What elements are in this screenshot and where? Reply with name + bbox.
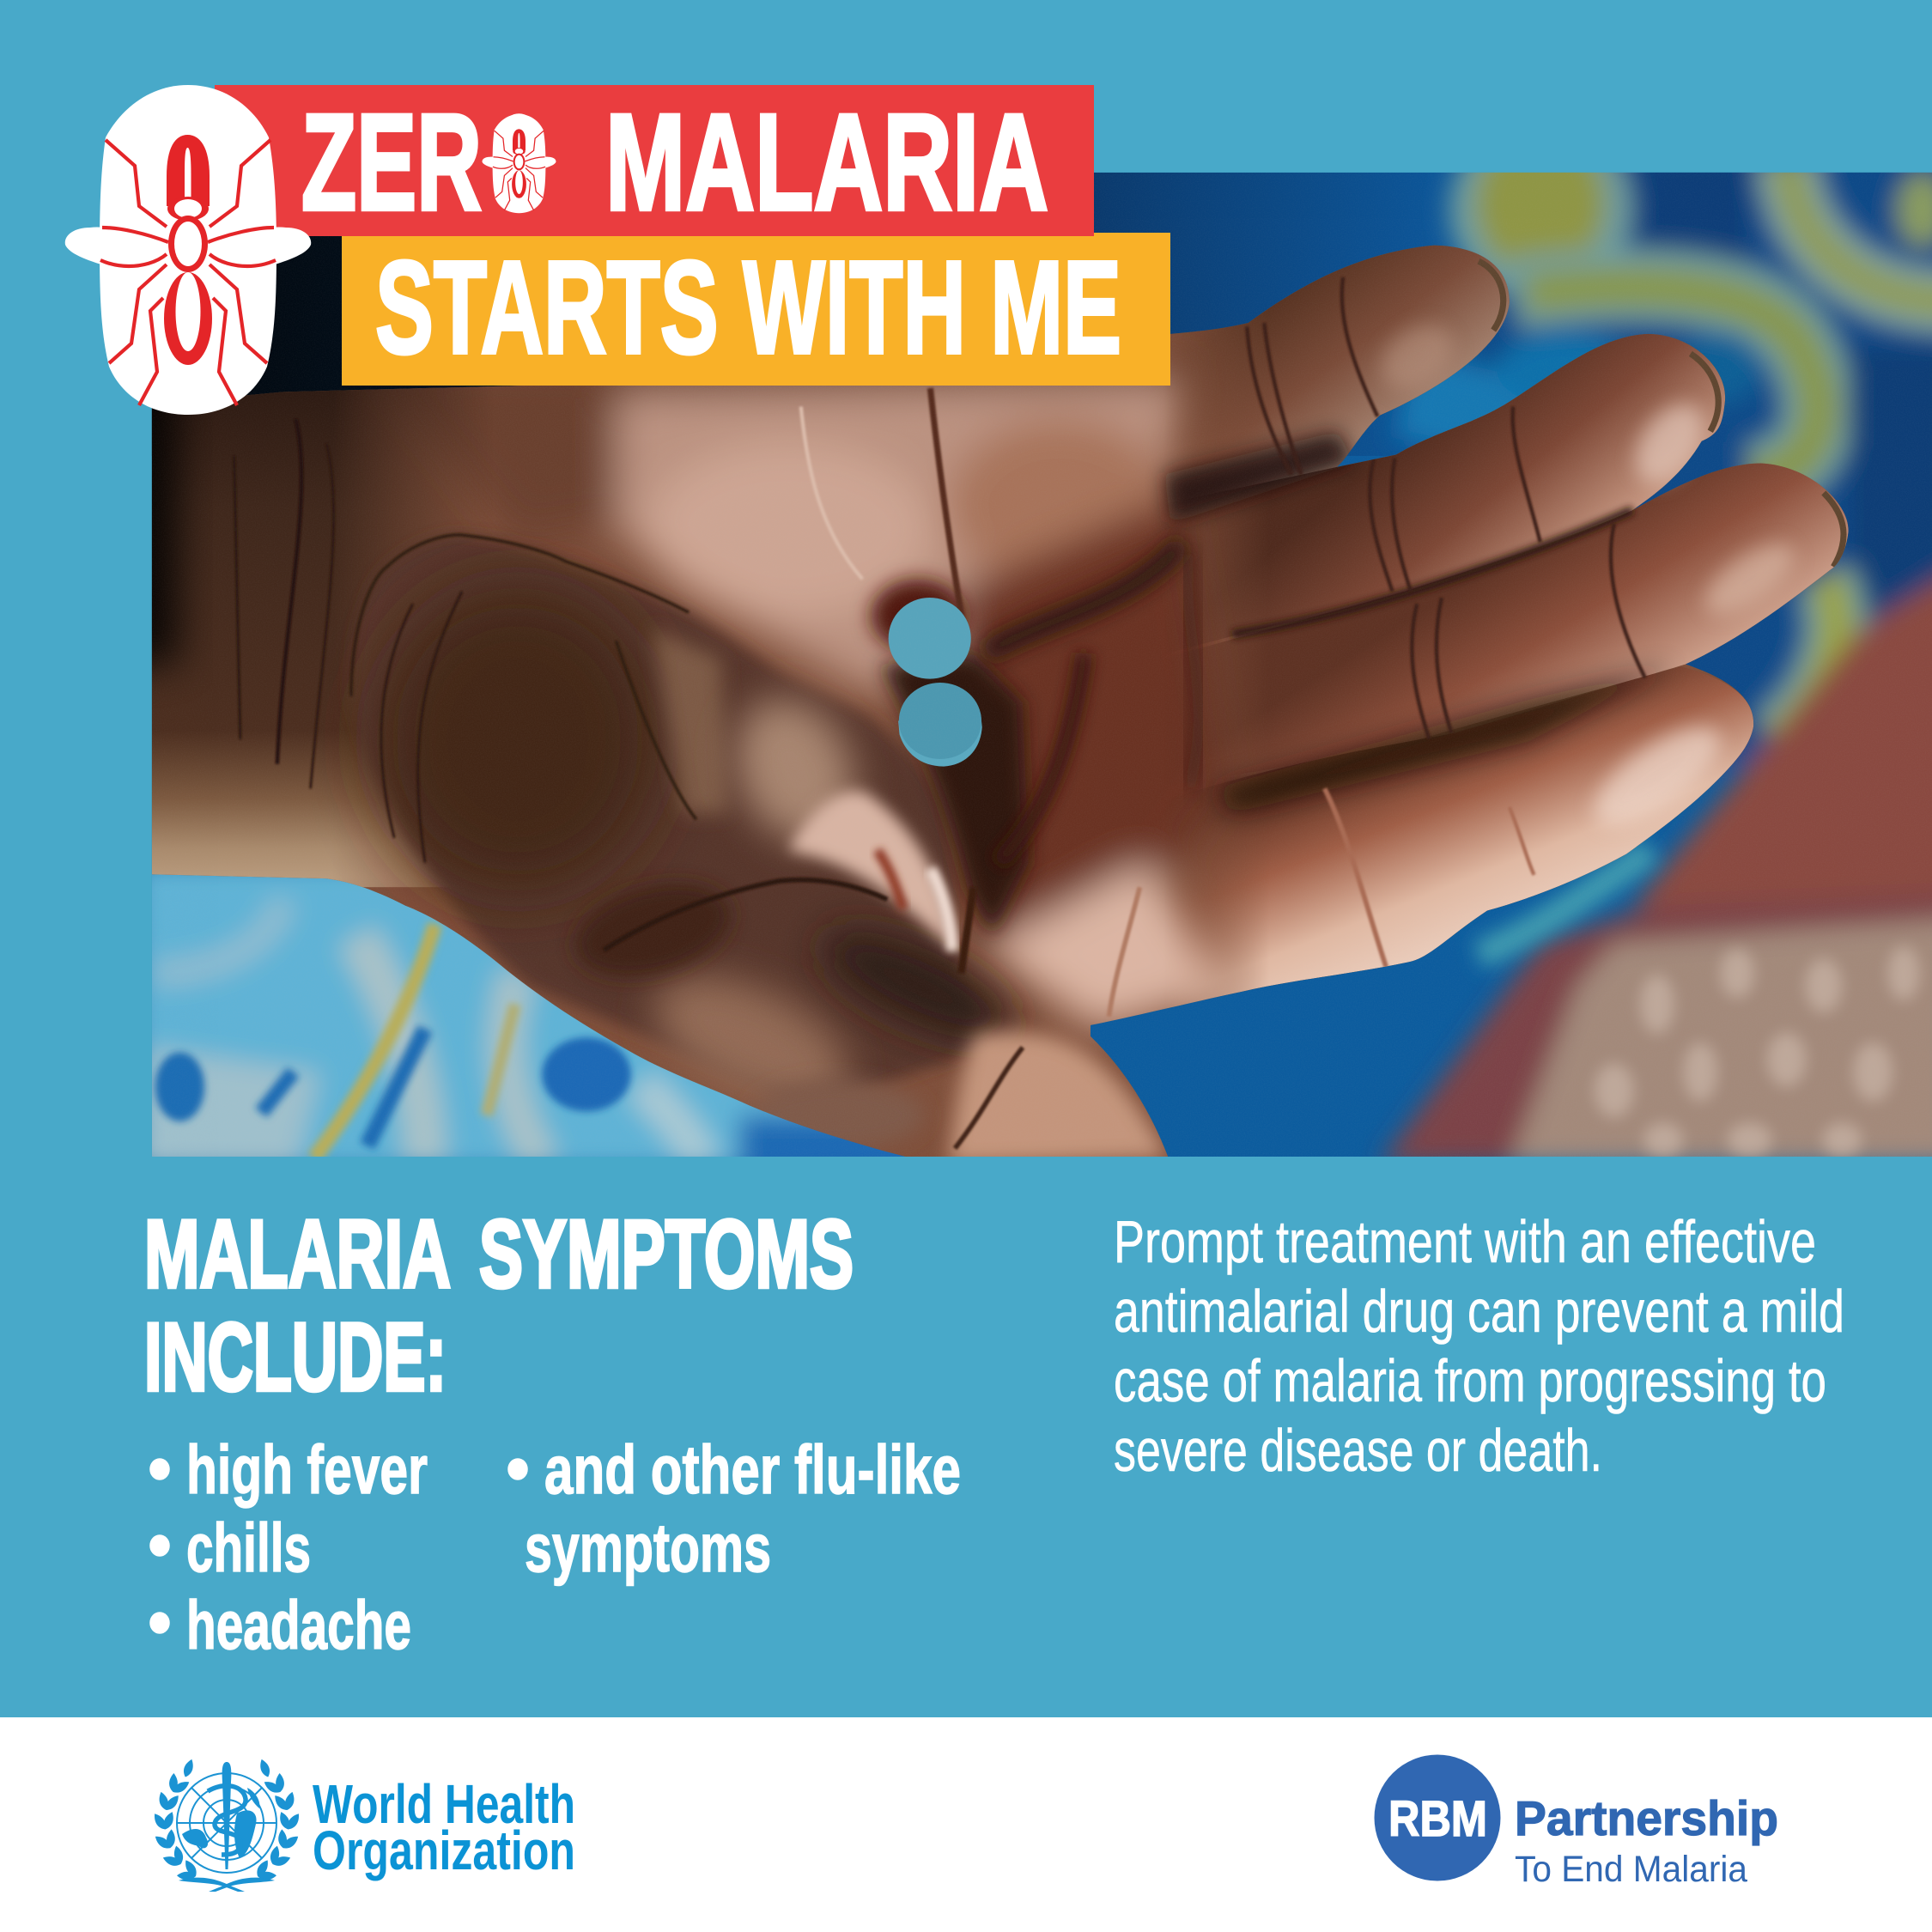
olive patch with grey-teal halo [1449, 121, 1631, 298]
lower left pattern [136, 862, 937, 1170]
logo: World Health Organization [151, 1758, 575, 1892]
logo: RBM Partnership To End Malaria: Partnership [1515, 1791, 1778, 1846]
lower thumb [635, 950, 868, 1133]
lower left details [155, 924, 631, 1158]
logo: RBM Partnership To End Malaria: To End Malaria [1515, 1849, 1747, 1890]
thumb mound [351, 535, 1168, 1164]
fingertip highlights [1622, 392, 1717, 495]
symptom list: chills [186, 1510, 311, 1586]
symptom list [150, 1431, 961, 1663]
title banner: Starts With Me: STARTS WITH ME [375, 234, 1121, 381]
film grain [152, 173, 1932, 1157]
title banner: Zero Malaria: ZER [301, 85, 482, 239]
paragraph: prompt treatment: severe disease or death. [1114, 1417, 1602, 1484]
title banner: Zero Malaria: MALARIA [605, 85, 1048, 239]
icon: WHO emblem [151, 1758, 302, 1892]
symptom list: symptoms [525, 1510, 771, 1586]
light streak beside little finger [1479, 850, 1651, 955]
palm and wrist creases [234, 388, 1023, 1148]
fingers [1048, 246, 1849, 1025]
icon: mosquito in zero capsule logo [65, 85, 311, 415]
serpent [208, 1786, 246, 1855]
hand [111, 234, 1873, 1170]
heading: malaria symptoms include: MALARIA [144, 1200, 451, 1308]
speckles on the cloth [1595, 946, 1920, 1157]
symptom list: and other flu-like [544, 1431, 961, 1508]
big arc [1516, 285, 1819, 478]
ring finger [1072, 464, 1849, 801]
two blue tablets [889, 598, 982, 767]
laurel leaves [151, 1758, 245, 1892]
paragraph: prompt treatment [1114, 1208, 1844, 1484]
finger joint creases [1109, 277, 1645, 1017]
shadow of the tablets [872, 579, 965, 653]
title banner: Zero Malaria [215, 85, 1094, 239]
heading: malaria symptoms include [144, 1200, 854, 1411]
WHO wordmark: World Health [313, 1773, 575, 1835]
logo: RBM Partnership To End Malaria: RBM [1388, 1791, 1487, 1847]
logo: RBM Partnership To End Malaria [1374, 1755, 1778, 1890]
footer panel [0, 1717, 1932, 1932]
upper tablet [889, 598, 971, 679]
small mosquito in the letter O [483, 114, 556, 213]
finger gaps and shadows [1164, 431, 1355, 524]
WHO wordmark: Organization [313, 1820, 575, 1881]
mauve cloth [1632, 567, 1932, 906]
photo background: blurred fabric [136, 121, 1932, 1176]
photo: hand holding two blue tablets [111, 121, 1932, 1176]
little finger [1048, 666, 1753, 1025]
WHO wordmark [313, 1773, 575, 1881]
middle finger [1072, 334, 1725, 677]
dark edge of the wrist [111, 357, 179, 665]
lower tablet [898, 683, 982, 767]
palm heel: pale area [369, 357, 1232, 1029]
title banner: Zero Malaria: O [493, 85, 545, 239]
rod [222, 1762, 231, 1869]
wrist [111, 369, 530, 887]
heading: malaria symptoms include: INCLUDE: [144, 1303, 447, 1411]
yellow strip right of ring finger [1774, 579, 1836, 739]
heading: malaria symptoms include: SYMPTOMS [479, 1200, 854, 1308]
pale fold [788, 791, 952, 950]
title banner: Starts With Me [342, 233, 1170, 386]
ring top right [1787, 161, 1932, 302]
index finger [1072, 246, 1510, 542]
symptom list: headache [186, 1587, 411, 1663]
nails [1479, 261, 1844, 567]
symptom list: high fever [186, 1431, 428, 1508]
